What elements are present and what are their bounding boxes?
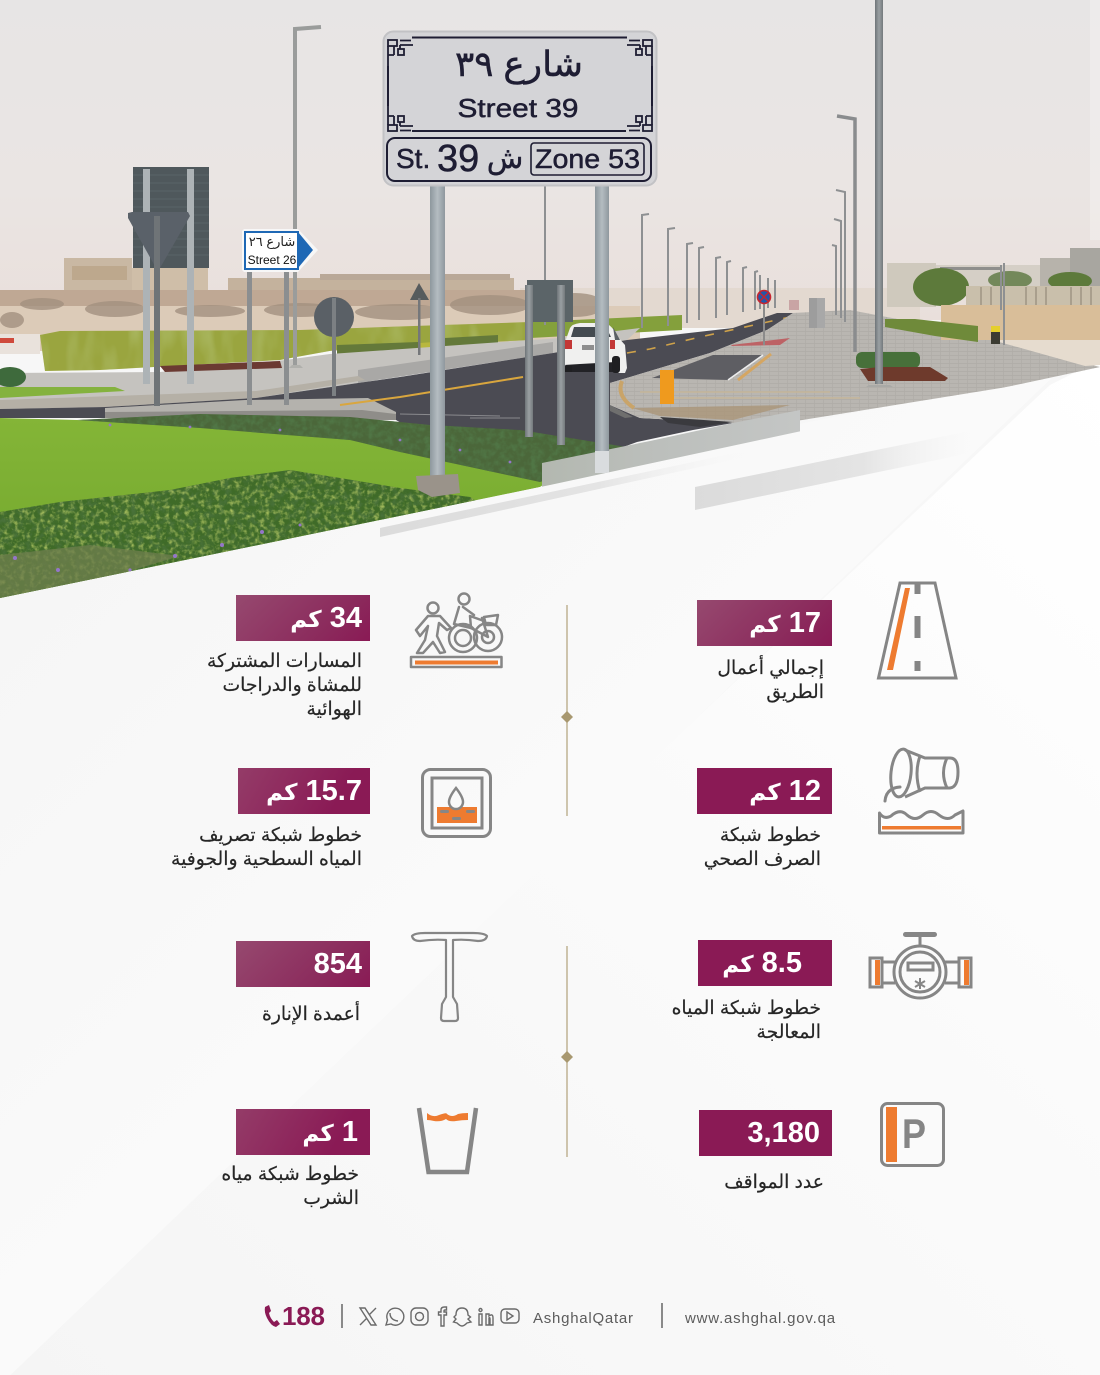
footer (264, 1301, 836, 1331)
street 26 sign: Street 26 (248, 253, 297, 267)
value badge: 1 كم (302, 1116, 358, 1148)
main street sign: 39 (437, 138, 479, 180)
description: عدد المواقف (724, 1171, 824, 1192)
description (672, 997, 821, 1042)
traffic island (105, 398, 396, 420)
road markings (340, 377, 523, 405)
icon: sewer pipe (880, 748, 963, 833)
sign post: left (430, 186, 445, 478)
icon: parking: P (902, 1110, 926, 1157)
value badge (238, 768, 370, 814)
value badge (698, 940, 832, 986)
icon: road (878, 583, 956, 678)
value badge: 854 (314, 948, 362, 980)
stat: treated water lines (672, 940, 832, 1042)
description (717, 655, 824, 703)
icon: whatsapp (386, 1308, 404, 1325)
description: أعمدة الإنارة (262, 1003, 360, 1024)
icon: facebook (438, 1307, 446, 1326)
hedges far (40, 315, 682, 375)
description: خطوط شبكة تصريف (199, 824, 362, 845)
orange bollard (660, 370, 674, 404)
icon: youtube (501, 1309, 519, 1323)
description: الطريق (766, 681, 824, 702)
perimeter wall (0, 290, 525, 306)
arched shed (966, 286, 1100, 306)
street lamps row (545, 186, 1004, 345)
stat: road works total (697, 600, 832, 703)
photo: street scene (0, 0, 1100, 598)
description: خطوط شبكة المياه (672, 997, 821, 1018)
no stopping sign (758, 290, 770, 345)
tall lamp poles right (837, 0, 893, 387)
hotline number: 188 (282, 1301, 325, 1331)
value badge: 8.5 كم (722, 947, 802, 979)
value badge (236, 1109, 370, 1155)
hedge right (885, 319, 978, 342)
center divider: top (561, 605, 573, 816)
planter (856, 352, 920, 368)
paved walkway (610, 310, 1100, 430)
street 26 sign: شارع ٢٦ (249, 234, 295, 250)
description: الصرف الصحي (704, 848, 821, 869)
icon: x (360, 1308, 376, 1325)
white car (564, 323, 627, 373)
description: إجمالي أعمال (717, 657, 824, 678)
right margin tint (1090, 0, 1100, 240)
grass (0, 418, 550, 600)
description (221, 1163, 359, 1209)
value badge (236, 595, 370, 641)
icon: pedestrian and cyclist (411, 594, 502, 667)
icon: parking (882, 1104, 944, 1166)
ornament corners (388, 40, 652, 131)
desert ground (0, 306, 640, 351)
icon: snapchat (454, 1308, 471, 1326)
main street sign: Zone 53 (535, 144, 640, 174)
small planting left (0, 367, 26, 387)
value badge: 3,180 (747, 1117, 820, 1149)
value badge: 17 كم (749, 607, 821, 639)
distant buildings left (64, 258, 514, 290)
icon: street lamp (412, 933, 487, 1021)
stat: drinking water (221, 1109, 370, 1209)
value badge (697, 768, 832, 814)
stat: shared paths (207, 595, 370, 720)
description: المسارات المشتركة (207, 650, 362, 671)
description (704, 824, 821, 870)
value badge (699, 1110, 832, 1156)
large rear sign (133, 167, 209, 384)
lamp post left (289, 27, 321, 368)
icon: instagram (411, 1308, 428, 1325)
asphalt road (0, 313, 793, 446)
far haze and sand (520, 288, 920, 328)
value badge (697, 600, 832, 646)
main street sign: شارع ٣٩ (455, 45, 583, 85)
icon: water meter valve (870, 932, 971, 998)
sky (0, 0, 1100, 320)
website: www.ashghal.gov.qa (685, 1310, 836, 1327)
dark sign posts middle (525, 280, 573, 445)
divider (661, 1303, 663, 1328)
description: للمشاة والدراجات (222, 674, 362, 695)
purple flowers (13, 424, 511, 584)
stat: parking spaces (699, 1110, 832, 1193)
icon: linkedin (479, 1314, 493, 1325)
description: الشرب (303, 1187, 359, 1208)
flowering hedge (77, 414, 640, 482)
far-end signs (789, 298, 825, 328)
main street sign (384, 32, 656, 186)
main street sign: St. (396, 143, 430, 174)
round sign back (314, 297, 354, 396)
blue street sign posts (247, 271, 289, 405)
main street sign: Street 39 (458, 93, 578, 123)
stat: lighting poles (236, 941, 370, 1025)
main street sign: ش (487, 142, 523, 175)
white barrier (0, 334, 40, 354)
yield sign back (128, 212, 190, 406)
center divider: bottom (561, 946, 573, 1157)
description: خطوط شبكة (720, 824, 821, 845)
value badge: 15.7 كم (266, 775, 362, 807)
icon: phone (264, 1305, 280, 1327)
shrub foreground (0, 470, 476, 598)
sign post: right (595, 186, 609, 471)
stat: sewer lines (697, 768, 832, 870)
frosted strip (542, 410, 800, 490)
sidewalk left (0, 328, 640, 409)
value badge (236, 941, 370, 987)
post base (416, 474, 460, 497)
description: خطوط شبكة مياه (221, 1163, 359, 1184)
description: الهوائية (307, 698, 362, 719)
icon: storm drain (422, 770, 490, 836)
palm trees (913, 268, 1092, 306)
description (207, 650, 362, 720)
value badge: 12 كم (749, 775, 821, 807)
street 26 sign (242, 229, 318, 272)
description: المياه السطحية والجوفية (171, 848, 362, 869)
social icons (341, 1304, 520, 1328)
handle: AshghalQatar (533, 1310, 634, 1327)
triangle sign back (410, 283, 429, 355)
boundary wall right (941, 305, 1100, 340)
description (171, 824, 362, 870)
buildings right (887, 248, 1100, 307)
stat: stormwater network (171, 768, 370, 870)
description: المعالجة (756, 1021, 821, 1042)
sand right (1000, 340, 1100, 366)
value badge: 34 كم (290, 602, 362, 634)
icon: water glass (419, 1108, 476, 1172)
